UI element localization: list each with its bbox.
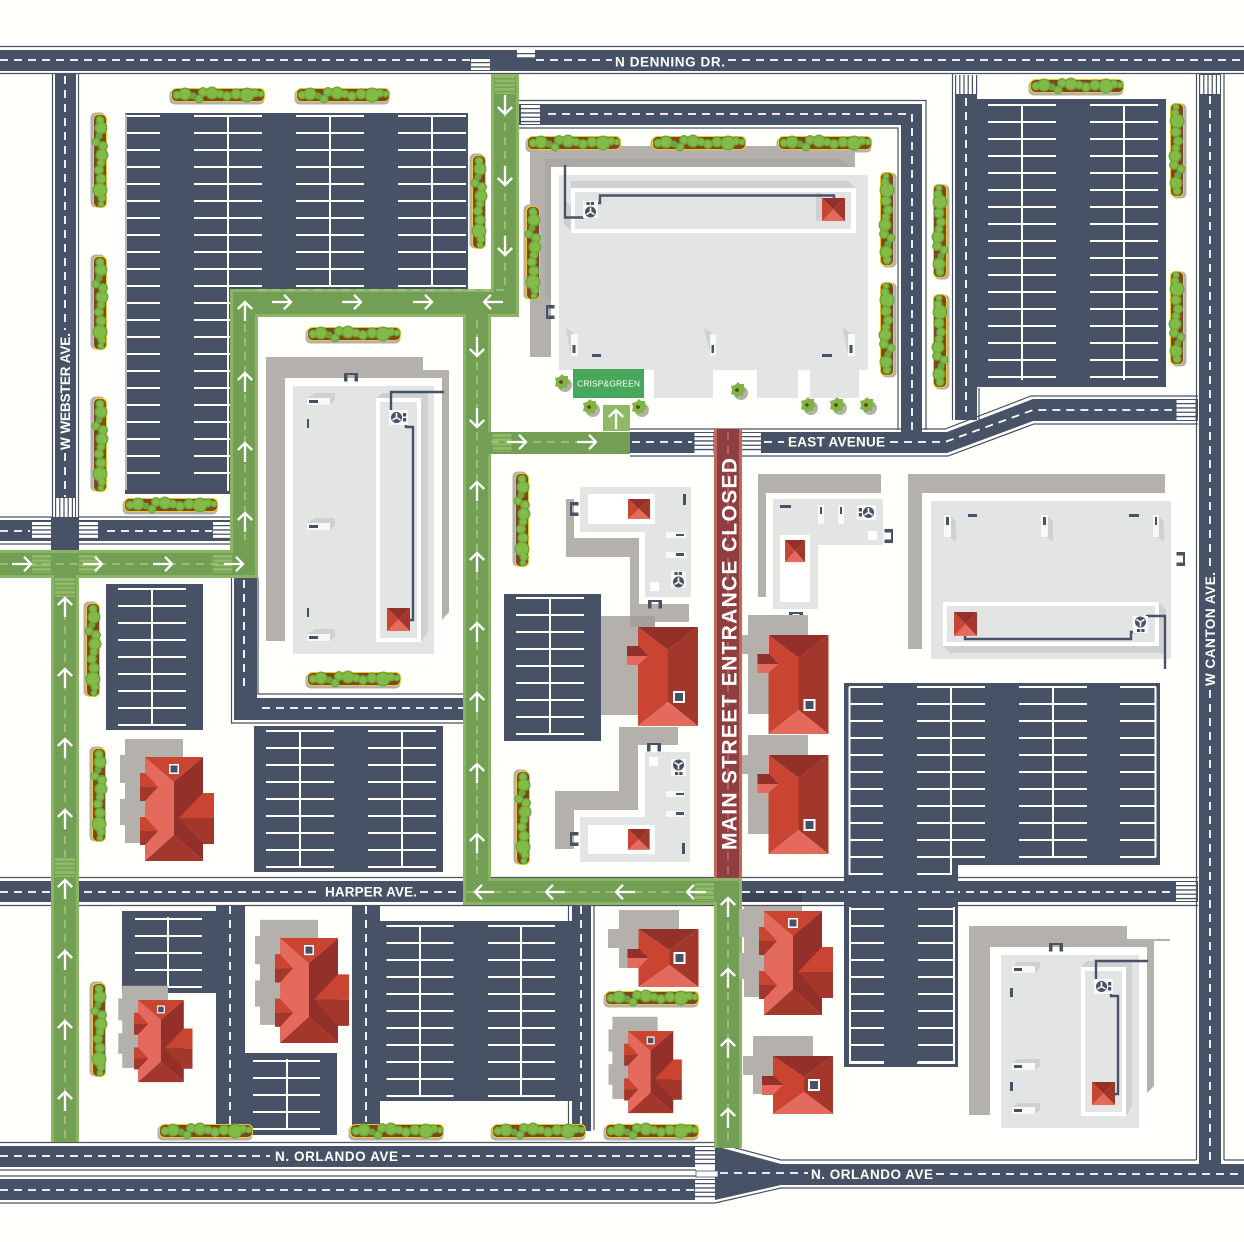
houses: large hip roofs bbox=[627, 627, 833, 1114]
icon: roof unit red bbox=[822, 198, 845, 221]
building: west bbox=[266, 357, 449, 668]
parking lot: west bbox=[106, 584, 203, 730]
rooftop details bbox=[566, 328, 855, 357]
label: N. Orlando Ave east: N. ORLANDO AVE bbox=[811, 1167, 933, 1182]
label: Main Street Entrance Closed: MAIN STREET ENTRANCE CLOSED bbox=[718, 458, 742, 850]
parking lot: south center with drives bbox=[352, 905, 594, 1131]
road: side drive behind west building bbox=[232, 578, 463, 723]
road: East Avenue bbox=[630, 396, 1198, 456]
houses: building shadows bbox=[601, 615, 813, 1094]
road: drive around Crisp & Green bbox=[519, 100, 926, 432]
road: N. Orlando Ave bbox=[0, 1142, 1244, 1203]
rooftop vents bbox=[1010, 962, 1040, 1114]
palms bbox=[555, 374, 877, 417]
road: W Canton Ave bbox=[1196, 74, 1224, 1166]
green route bbox=[0, 74, 742, 1148]
rooftop pipes bbox=[565, 165, 834, 218]
road: Harper Ave bbox=[0, 878, 1198, 906]
building: Crisp and Green bbox=[530, 146, 876, 407]
road: W Webster Ave bbox=[52, 74, 78, 520]
sign: Crisp and Green logo bbox=[573, 369, 644, 398]
building: east large bbox=[908, 474, 1185, 669]
icon: ac unit bbox=[583, 201, 598, 218]
building: center lower L bbox=[555, 727, 690, 862]
parking lot: large northwest bbox=[125, 113, 468, 494]
icon: gate bbox=[546, 305, 554, 319]
houses: winged roofs bbox=[118, 739, 833, 1113]
closed route: Main Street red band bbox=[714, 429, 742, 879]
building: southeast bbox=[969, 926, 1170, 1136]
building: east L bbox=[758, 474, 893, 620]
label: W Canton Ave: W CANTON AVE. bbox=[1203, 572, 1218, 686]
house shadow falling across Harper Ave bbox=[742, 893, 802, 906]
parking lot: east bbox=[844, 683, 1160, 1067]
rooftop vents bbox=[307, 393, 335, 641]
sign: Crisp and Green logo: CRISP&GREEN bbox=[577, 378, 640, 388]
parking lot: center bbox=[504, 594, 601, 741]
rooftop vents bbox=[944, 514, 1164, 542]
hedges bbox=[84, 78, 1186, 1140]
building: center upper L bbox=[566, 487, 691, 622]
label: N. Orlando Ave west: N. ORLANDO AVE bbox=[275, 1149, 398, 1164]
direction arrows bbox=[12, 95, 735, 1128]
road: west cross street bbox=[0, 517, 232, 551]
road: N Denning Dr bbox=[0, 46, 1244, 74]
label: Harper Ave: HARPER AVE. bbox=[325, 884, 417, 900]
label: East Avenue: EAST AVENUE bbox=[788, 434, 885, 450]
parking lot: center west bbox=[254, 726, 443, 872]
parking lot: south west with drive bbox=[122, 905, 337, 1135]
label: W Webster Ave: W WEBSTER AVE. bbox=[58, 333, 73, 450]
parking lot: northeast bbox=[952, 74, 1166, 420]
label: N Denning Dr: N DENNING DR. bbox=[615, 54, 725, 70]
